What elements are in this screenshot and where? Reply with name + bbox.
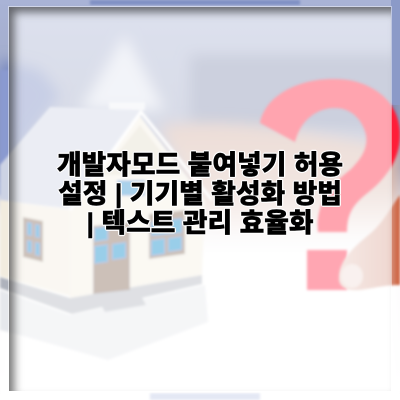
right window panes xyxy=(151,218,182,256)
roof trim xyxy=(70,112,212,210)
dark blue left edge strip xyxy=(0,70,9,195)
grey-blue right wall xyxy=(190,55,400,130)
roof side xyxy=(0,107,142,208)
door panes xyxy=(94,226,126,264)
right window frame xyxy=(149,210,185,259)
chimney xyxy=(109,102,145,110)
title line 1: 개발자모드 붙여넣기 허용 xyxy=(57,150,343,180)
front wall and gable xyxy=(70,116,205,298)
title line 3: | 텍스트 관리 효율화 xyxy=(86,208,314,238)
steps xyxy=(96,290,146,312)
title text xyxy=(56,150,344,240)
dark blue right edge strip xyxy=(391,0,400,105)
left wall xyxy=(0,200,70,296)
reflection xyxy=(0,285,208,360)
house xyxy=(0,102,212,360)
dark blue top band xyxy=(90,0,300,5)
gable shade xyxy=(100,125,180,175)
blurred hand behind question mark xyxy=(160,123,400,232)
dark blue left shape xyxy=(0,60,60,175)
question mark dot xyxy=(307,250,347,290)
title line 2: 설정 | 기기별 활성화 방법 xyxy=(58,179,342,209)
finger xyxy=(339,195,400,290)
strip of blue at the bottom edge xyxy=(150,393,260,400)
attic window xyxy=(117,180,145,196)
white table xyxy=(0,246,400,400)
foundation xyxy=(0,275,202,314)
pale mound behind house xyxy=(80,35,165,110)
finger nail xyxy=(341,264,363,288)
left window panes xyxy=(27,222,40,256)
left window frame xyxy=(23,217,43,262)
door xyxy=(93,222,130,294)
question mark curve xyxy=(260,79,400,232)
question mark xyxy=(260,79,400,290)
